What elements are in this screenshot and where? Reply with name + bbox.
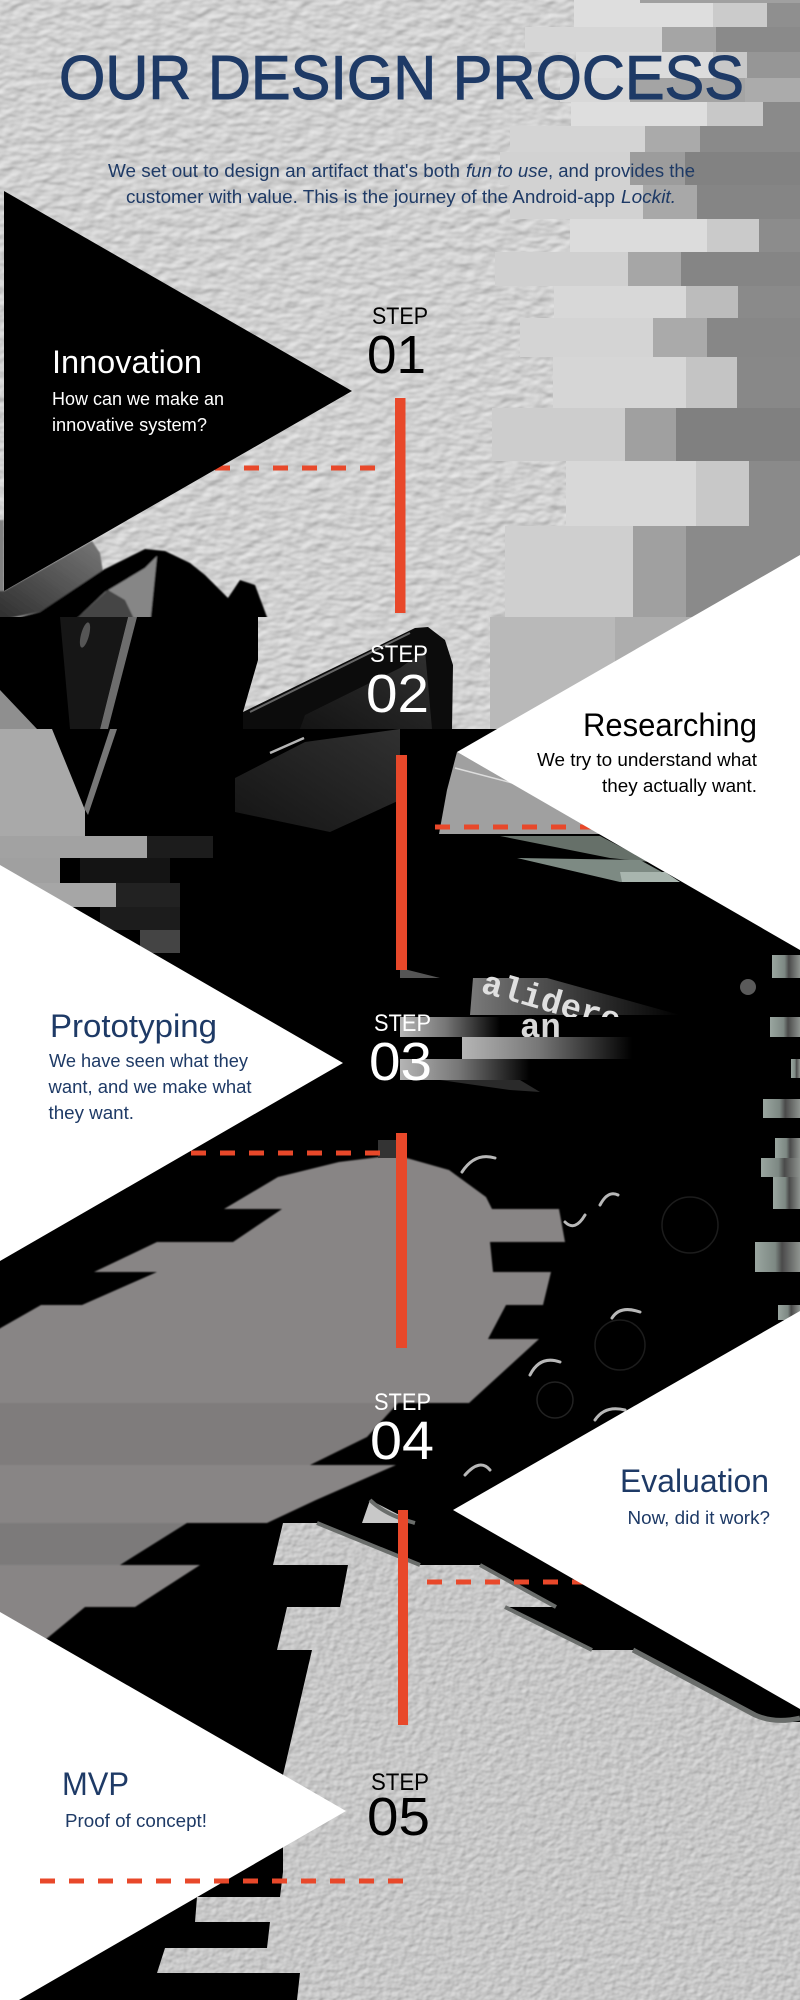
step 02 label: STEP — [370, 641, 428, 668]
intro text: , and provides the — [548, 161, 695, 181]
glitch strips, right side — [492, 0, 800, 617]
step 04 label: 04 — [370, 1411, 434, 1471]
photo sign — [470, 978, 680, 1015]
hand — [0, 1155, 565, 1640]
body: Innovation — [52, 389, 224, 435]
step 01 label: 01 — [367, 325, 426, 385]
heading: Prototyping: Prototyping — [50, 1008, 217, 1044]
timeline segment 4 — [398, 1510, 408, 1725]
step 04 label: STEP — [374, 1389, 431, 1416]
wallet — [243, 627, 453, 729]
dashed connector 4 — [427, 1580, 610, 1584]
body: Innovation: innovative system? — [52, 415, 207, 435]
step 03 label — [369, 1010, 432, 1092]
title: OUR DESIGN PROCESS — [59, 44, 744, 113]
panel: MVP — [0, 1612, 346, 2000]
phone rim — [317, 1500, 800, 1720]
background: glitched photo collage: an — [520, 1010, 561, 1048]
right edge strips — [755, 955, 800, 1320]
step 01 label: STEP — [372, 303, 428, 330]
step 03 label: 03 — [369, 1032, 432, 1092]
timeline segment 1 — [395, 398, 406, 613]
heading: MVP: MVP — [62, 1766, 129, 1802]
dashed connector 1 — [200, 466, 375, 470]
dashed connector 5 — [40, 1878, 404, 1884]
dashed connector 3 — [170, 1150, 380, 1156]
dark object above the seam — [0, 520, 270, 625]
panel: Prototyping — [0, 865, 343, 1261]
timeline segment 2 — [396, 755, 407, 970]
step 04 label — [370, 1389, 434, 1471]
steel wedge, right — [439, 752, 600, 834]
body: Evaluation: Now, did it work? — [628, 1508, 770, 1528]
body: Innovation: How can we make an — [52, 389, 224, 409]
body: Prototyping: want, and we make what — [47, 1077, 252, 1097]
body: Researching — [537, 750, 757, 796]
body: Prototyping: We have seen what they — [49, 1051, 248, 1071]
step 02 label: 02 — [366, 664, 429, 724]
intro text: customer with value. This is the journey of the Android-app — [126, 187, 615, 207]
wall texture, lower — [140, 1490, 800, 2000]
wall, strip two — [243, 617, 490, 729]
body: Prototyping — [47, 1051, 252, 1123]
left side photo strips — [0, 690, 37, 729]
body: MVP: Proof of concept! — [65, 1811, 207, 1831]
dashed connector 2 — [435, 824, 610, 830]
black photo body — [0, 617, 800, 1537]
panel: Evaluation — [453, 1311, 800, 1709]
panel: Researching — [457, 555, 800, 950]
body: Researching: We try to understand what — [537, 750, 757, 770]
timeline segment 3 — [396, 1133, 407, 1348]
intro text — [108, 161, 695, 207]
heading: Researching: Researching — [583, 707, 757, 743]
step 03 label: STEP — [374, 1010, 431, 1037]
step 02 label — [366, 641, 429, 724]
keyboard keys — [462, 1157, 718, 1475]
body: Prototyping: they want. — [48, 1103, 134, 1123]
heading: Evaluation: Evaluation — [620, 1463, 769, 1499]
step 05 label: STEP — [371, 1769, 429, 1796]
intro text: fun to use — [466, 161, 548, 181]
body: Researching: they actually want. — [602, 776, 757, 796]
background: glitched photo collage: alidere — [477, 966, 625, 1042]
wall texture, upper — [0, 0, 608, 628]
step 05 label: 05 — [367, 1787, 430, 1847]
intro text: Lockit. — [621, 187, 676, 207]
panel: Innovation — [4, 191, 352, 591]
intro text: We set out to design an artifact that's both — [108, 161, 460, 181]
heading: Innovation: Innovation — [52, 344, 202, 380]
